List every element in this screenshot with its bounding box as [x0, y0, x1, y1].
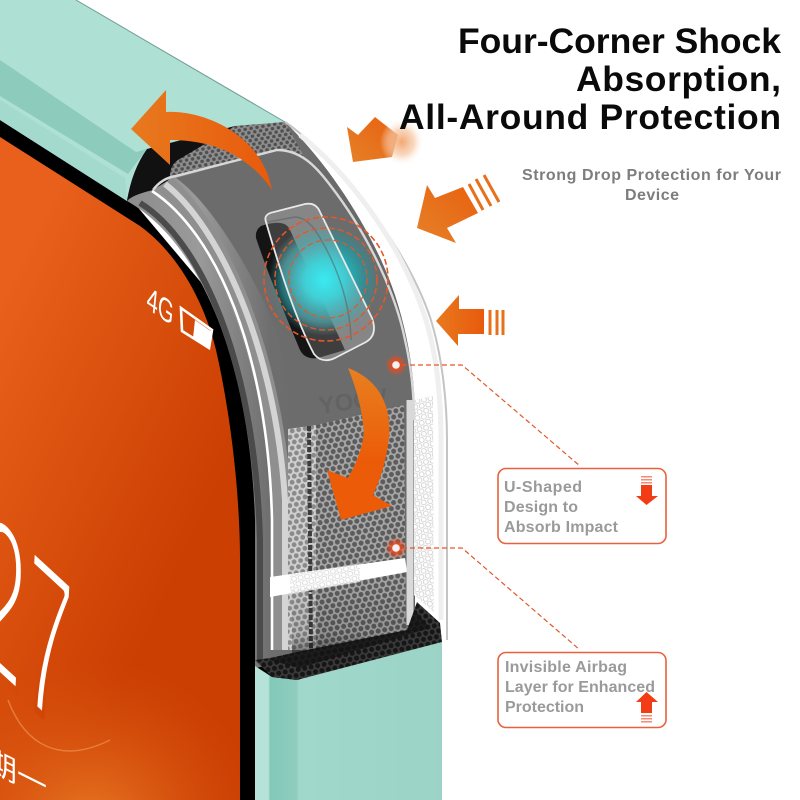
callout: U-shaped design — [498, 468, 666, 544]
camera module — [256, 204, 388, 360]
callout: invisible airbag — [498, 652, 666, 728]
grey corner bumper — [127, 122, 415, 668]
callout 1 text: U-Shaped — [504, 479, 582, 496]
connector 2 glow — [385, 537, 407, 559]
callout 2 text: Invisible Airbag — [505, 659, 627, 676]
band mesh overlay — [290, 564, 360, 594]
mint case top edge — [0, 0, 285, 201]
soft inner clear edge — [300, 135, 441, 620]
callout 2 box — [498, 652, 666, 728]
arrow 3 stripes — [490, 310, 503, 335]
title: Four-Corner Shock — [458, 21, 781, 61]
connector 2 dot — [392, 544, 400, 552]
screen lower glow — [0, 650, 240, 800]
darker lip inner — [268, 610, 430, 668]
arrow 1 smudge — [380, 118, 424, 166]
mint top edge line — [76, 0, 285, 122]
callout 1 box — [498, 468, 666, 544]
subtitle — [522, 167, 781, 204]
curved arrow: down — [327, 368, 392, 520]
dark inner rim — [140, 203, 260, 660]
screen wallpaper curve — [8, 700, 110, 751]
title — [399, 21, 781, 137]
mesh airbag layer — [270, 396, 434, 660]
title: Absorption, — [576, 59, 781, 99]
impact arrow 1 — [347, 117, 424, 166]
callout connector 1 — [385, 354, 580, 466]
mint lower body — [255, 642, 442, 800]
outer clear edge — [285, 122, 447, 640]
white band — [270, 558, 407, 597]
inner lens arc — [268, 217, 351, 340]
bright rim line — [152, 191, 272, 650]
subtitle: Device — [625, 187, 679, 204]
mint light lower strip — [0, 100, 127, 201]
faint brand mark: YOOV — [317, 384, 389, 420]
black bottom lip — [255, 602, 442, 680]
arrow 3 shape — [436, 295, 484, 346]
impact arrow 2 — [417, 175, 499, 243]
callout 2 text: Layer for Enhanced — [505, 679, 655, 696]
connector 1 dot — [392, 361, 400, 369]
callout 1 text: Design to — [504, 499, 578, 516]
mint darker groove — [0, 60, 147, 174]
subtitle: Strong Drop Protection for Your — [522, 167, 781, 184]
connector 1 glow — [385, 354, 407, 376]
callout 1 text: Absorb Impact — [504, 519, 619, 536]
phone screen and frame — [0, 118, 300, 800]
icon: red up arrow — [636, 692, 658, 722]
callout connector 2 — [385, 537, 580, 650]
silver band highlight — [165, 184, 285, 650]
silver band base — [165, 184, 282, 650]
arrow 2 shape — [417, 185, 478, 243]
callout 1 text — [504, 479, 619, 536]
dark inner body face — [176, 150, 414, 655]
mint case bottom — [255, 602, 442, 800]
right translucent mesh — [414, 396, 434, 612]
lower shade — [292, 575, 406, 660]
connector 1 line — [402, 365, 580, 466]
connector 2 line — [402, 548, 580, 650]
black phone bezel — [0, 118, 300, 800]
curved arrow: top — [131, 90, 272, 190]
transparent case outline — [153, 122, 447, 640]
top mesh strip — [170, 122, 306, 176]
left hex strip — [288, 425, 316, 650]
arrow 2 stripes — [469, 175, 499, 210]
mint top face — [0, 0, 285, 201]
arrow 1 shape — [347, 117, 398, 162]
central hex mesh — [316, 405, 406, 650]
inner case sheen — [153, 150, 414, 420]
callout 2 text: Protection — [505, 699, 584, 716]
impact rings — [264, 217, 388, 341]
dark top corner — [127, 126, 235, 201]
silver right edge — [406, 400, 414, 625]
black camera slot — [256, 223, 345, 358]
impact arrow 3 — [436, 295, 503, 346]
bumper body — [127, 122, 415, 668]
title: All-Around Protection — [399, 97, 781, 137]
orange screen — [0, 137, 240, 800]
callout 2 text — [505, 659, 655, 716]
clear lens cover — [265, 204, 374, 360]
dark mesh seam — [309, 426, 311, 650]
battery icon — [181, 308, 212, 348]
status text 4G: 4G — [145, 280, 175, 334]
icon: red down arrow — [636, 476, 658, 505]
lens glow — [268, 224, 380, 336]
